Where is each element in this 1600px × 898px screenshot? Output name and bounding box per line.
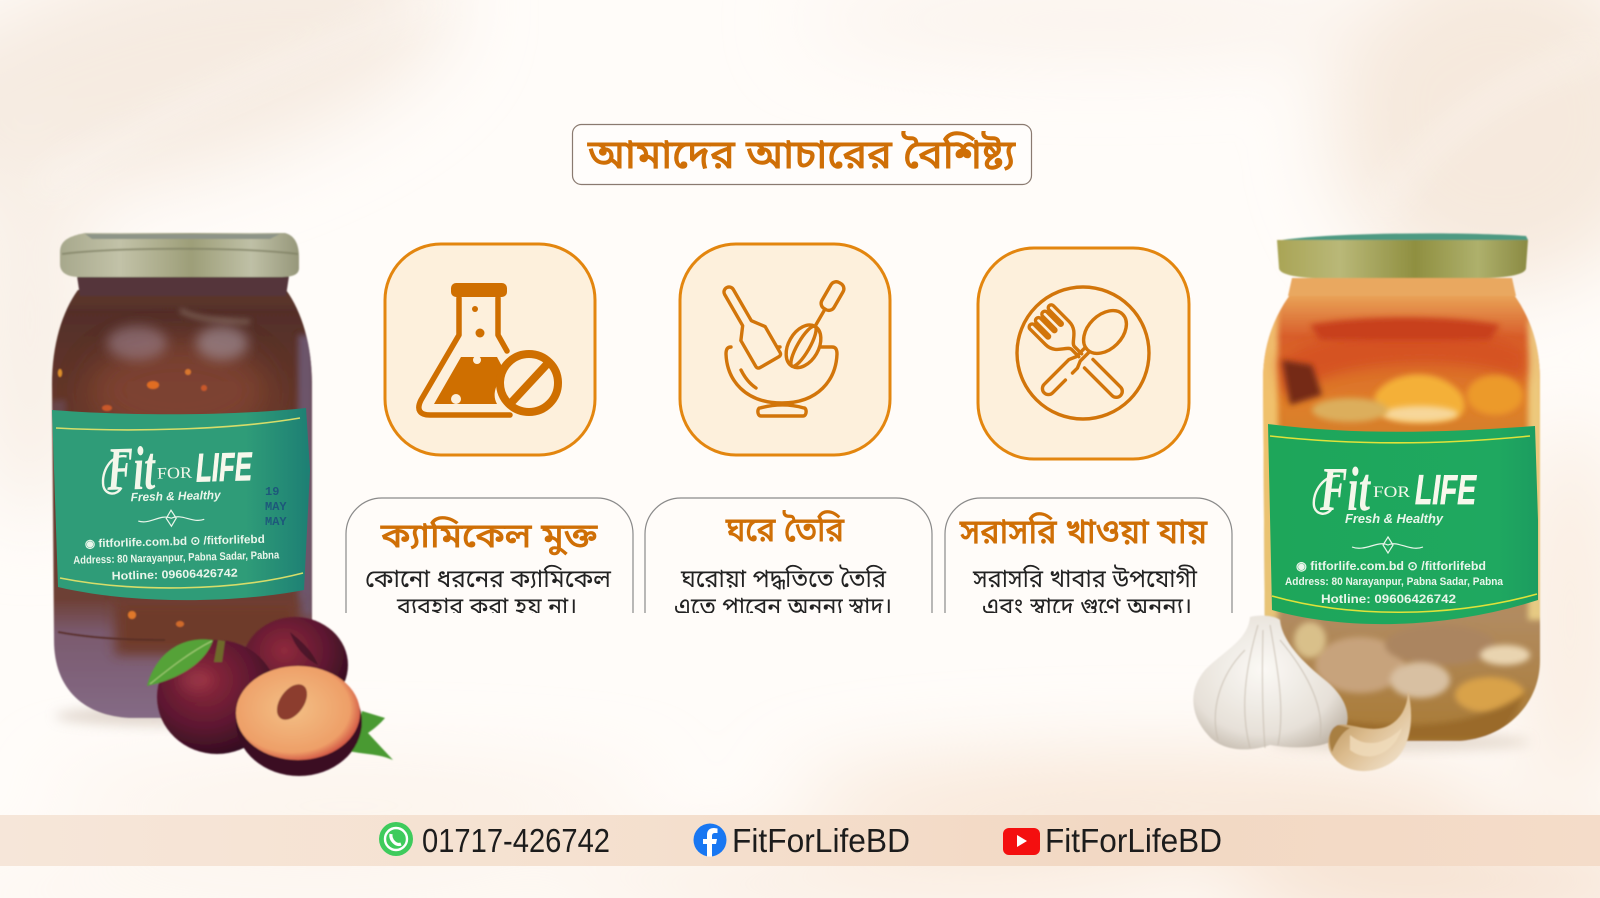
feature icon: mixing bowl: [680, 244, 890, 455]
left jar label: [52, 408, 310, 600]
left jar label: Hotline: 09606426742: [112, 568, 238, 583]
right jar label: Fresh & Healthy: [1345, 512, 1444, 526]
leaf: [147, 639, 213, 686]
footer contact band: [0, 815, 1600, 866]
whole plum: [157, 640, 277, 754]
feature icon: no chemicals flask: [385, 244, 595, 455]
card: home made: [645, 498, 932, 621]
left jar label: 19: [265, 485, 279, 499]
right jar label: Fit: [1319, 456, 1371, 524]
title box: আমাদের আচারের বৈশিষ্ট্য: [587, 131, 1016, 177]
feature icon: spoon and fork: [978, 248, 1189, 459]
leaves behind cut plum: [340, 711, 393, 760]
garlic: [1193, 616, 1411, 771]
right jar label: LIFE: [1415, 466, 1477, 513]
back plum: [242, 617, 348, 713]
left jar label: FOR: [157, 465, 193, 483]
left jar label: Fresh & Healthy: [130, 488, 222, 504]
card: chemical free: কোনো ধরনের ক্যামিকেল: [365, 564, 612, 593]
right jar label: Hotline: 09606426742: [1321, 592, 1456, 606]
right jar label: Address: 80 Narayanpur, Pabna Sadar, Pabna: [1285, 576, 1504, 588]
cut plum: [236, 666, 362, 776]
card: home made: এতে পাবেন অনন্য স্বাদ।: [674, 593, 892, 621]
right jar: garlic pickle: [1258, 233, 1544, 751]
card: chemical free: [346, 498, 633, 621]
facebook handle: FitForLifeBD: [732, 822, 910, 859]
card: chemical free: ক্যামিকেল মুক্ত: [380, 516, 598, 555]
card: home made: ঘরে তৈরি: [725, 510, 845, 549]
card: ready to eat: সরাসরি খাওয়া যায়: [959, 512, 1208, 551]
right jar label: FOR: [1373, 484, 1410, 501]
card: ready to eat: এবং স্বাদে গুণে অনন্য।: [982, 593, 1192, 621]
garlic bulb: [1193, 616, 1348, 749]
icon: whatsapp: [379, 822, 413, 856]
card: ready to eat: সরাসরি খাবার উপযোগী: [972, 564, 1197, 593]
left jar label: MAY: [265, 515, 287, 529]
icon: facebook: [694, 824, 726, 856]
card: ready to eat: [945, 498, 1232, 621]
icon: youtube: [1003, 828, 1040, 855]
whatsapp number: 01717-426742: [422, 822, 610, 859]
left jar label: ◉ fitforlife.com.bd ⊙ /fitforlifebd: [85, 534, 265, 550]
plums: [147, 617, 393, 776]
left jar: plum pickle: [50, 233, 314, 726]
left jar label: MAY: [265, 500, 287, 514]
youtube handle: FitForLifeBD: [1045, 822, 1222, 859]
left jar label: LIFE: [195, 445, 253, 491]
card: home made: ঘরোয়া পদ্ধতিতে তৈরি: [680, 564, 887, 593]
title box: [572, 124, 1032, 184]
garlic clove: [1328, 690, 1411, 771]
right jar label: [1268, 424, 1538, 624]
left jar label: Fit: [105, 435, 157, 504]
right jar label: ◉ fitforlife.com.bd ⊙ /fitforlifebd: [1296, 559, 1486, 573]
left jar label: Address: 80 Narayanpur, Pabna Sadar, Pabna: [73, 549, 280, 567]
card: chemical free: ব্যবহার করা হয় না।: [396, 593, 577, 621]
